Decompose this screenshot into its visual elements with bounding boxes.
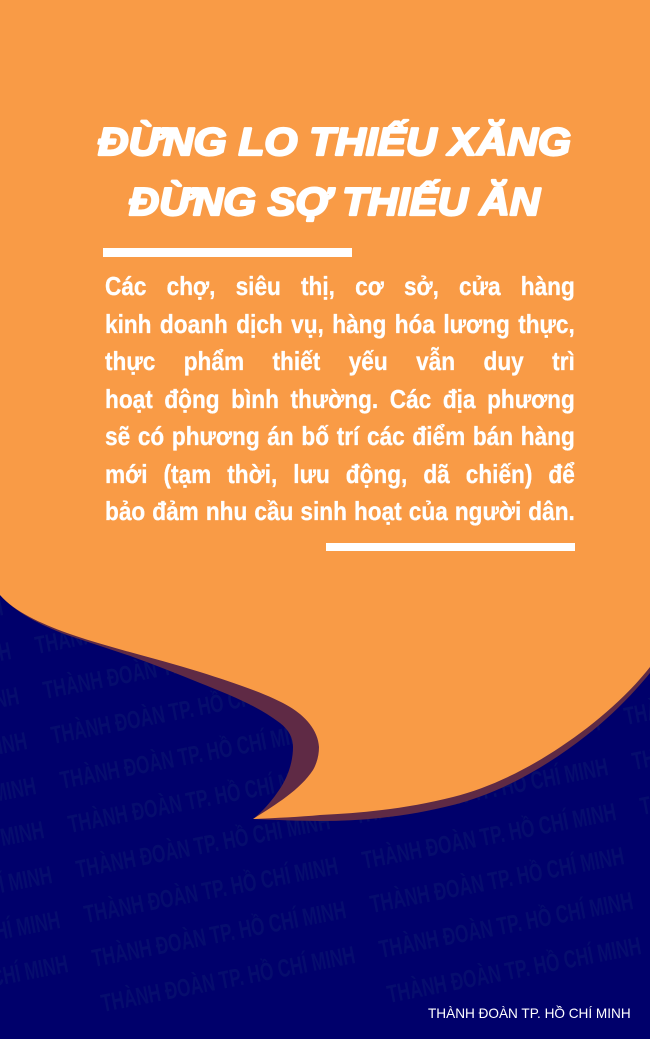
watermark pattern: THÀNH ĐOÀN TP. HỒ CHÍ MINH <box>89 894 348 973</box>
watermark pattern: THÀNH ĐOÀN TP. HỒ CHÍ MINH <box>98 939 357 1018</box>
watermark pattern: THÀNH ĐOÀN TP. HỒ CHÍ MINH <box>40 626 299 705</box>
body paragraph <box>105 271 575 526</box>
body paragraph: hoạt động bình thường. Các địa phương <box>105 384 575 414</box>
watermark pattern: THÀNH ĐOÀN TP. HỒ CHÍ MINH <box>24 537 283 616</box>
body paragraph: sẽ có phương án bố trí các điểm bán hàng <box>105 421 575 451</box>
watermark pattern: THÀNH ĐOÀN TP. HỒ CHÍ MINH <box>57 716 316 795</box>
watermark pattern: THÀNH ĐOÀN TP. HỒ CHÍ MINH <box>32 581 291 660</box>
watermark pattern <box>0 537 650 1027</box>
top divider bar <box>103 248 352 257</box>
orange speech bubble <box>0 0 650 819</box>
watermark pattern: THÀNH ĐOÀN TP. HỒ CHÍ MINH <box>73 805 332 884</box>
title: ĐỪNG LO THIẾU XĂNG <box>98 120 571 164</box>
bottom divider bar <box>326 543 575 551</box>
watermark pattern: THÀNH ĐOÀN TP. HỒ CHÍ MINH <box>65 760 324 839</box>
title <box>98 120 571 224</box>
body paragraph: bảo đảm nhu cầu sinh hoạt của người dân. <box>105 496 575 526</box>
title: ĐỪNG SỢ THIẾU ĂN <box>129 180 541 224</box>
watermark pattern: THÀNH ĐOÀN TP. HỒ CHÍ MINH <box>81 850 340 929</box>
body paragraph: mới (tạm thời, lưu động, dã chiến) để <box>105 459 575 489</box>
body paragraph: kinh doanh dịch vụ, hàng hóa lương thực, <box>105 309 575 339</box>
body paragraph: thực phẩm thiết yếu vẫn duy trì <box>105 346 575 376</box>
bubble shadow <box>0 560 650 821</box>
watermark pattern: THÀNH ĐOÀN TP. HỒ CHÍ MINH <box>48 671 307 750</box>
credit: THÀNH ĐOÀN TP. HỒ CHÍ MINH <box>428 1006 631 1021</box>
body paragraph: Các chợ, siêu thị, cơ sở, cửa hàng <box>105 271 575 301</box>
